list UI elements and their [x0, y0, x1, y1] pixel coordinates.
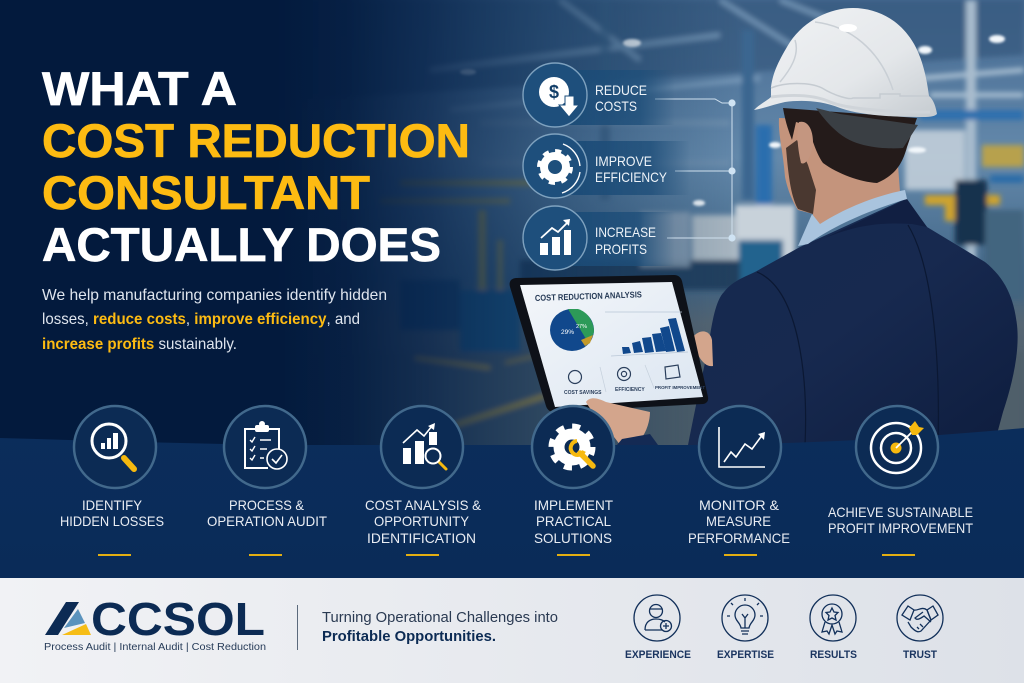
- badge: results: RESULTS: [810, 649, 857, 661]
- consultant wearing white hard hat: [688, 8, 1018, 445]
- step 6: achieve sustainable profit improvement: ACHIEVE SUSTAINABLE: [828, 504, 973, 520]
- step 5: monitor and measure performance: PERFORMANCE: [688, 530, 790, 546]
- badge: trust: TRUST: [903, 649, 937, 661]
- step 2: process and operation audit: PROCESS &: [229, 497, 305, 513]
- step 5: monitor and measure performance: MEASURE: [706, 513, 771, 529]
- hand on right of tablet: [692, 331, 713, 366]
- tablet metrics row: [568, 365, 680, 392]
- callout: improve efficiency: EFFICIENCY: [595, 169, 668, 185]
- footer tagline: [322, 609, 558, 645]
- tablet screen: [520, 282, 703, 407]
- ear: [798, 122, 813, 163]
- callout: increase profits: INCREASE: [595, 224, 656, 240]
- callout: reduce costs: COSTS: [595, 98, 637, 114]
- title: ACTUALLY DOES: [42, 218, 441, 271]
- step 4: implement practical solutions: PRACTICAL: [536, 513, 611, 529]
- tablet metric labels: EFFICIENCY: [615, 387, 645, 393]
- connector lines: [655, 99, 736, 242]
- benefit callouts with connector: [523, 63, 736, 270]
- hand below tablet: [586, 398, 650, 445]
- badge: expertise: [717, 595, 774, 661]
- step 6: achieve sustainable profit improvement: PROFIT IMPROVEMENT: [828, 520, 973, 536]
- shirt collar: [798, 190, 907, 246]
- tablet held by consultant: [510, 275, 713, 445]
- step 5: monitor and measure performance: [688, 406, 790, 556]
- step 4: implement practical solutions: IMPLEMENT: [534, 497, 613, 513]
- hat strap: [816, 108, 918, 148]
- tablet metric labels: COST SAVINGS: [564, 390, 602, 396]
- step 3: cost analysis: OPPORTUNITY: [374, 513, 470, 529]
- badge: trust: [897, 595, 943, 661]
- step 1: identify hidden losses: HIDDEN LOSSES: [60, 513, 164, 529]
- step 3: cost analysis: [365, 406, 482, 556]
- badge: experience: EXPERIENCE: [625, 649, 691, 661]
- step 2: process and operation audit: [207, 406, 327, 556]
- step 3: cost analysis: COST ANALYSIS &: [365, 497, 482, 513]
- factory background photo: [0, 0, 1024, 450]
- step 2: process and operation audit: OPERATION AUDIT: [207, 513, 327, 529]
- tablet metric labels: PROFIT IMPROVEMENT: [655, 385, 705, 390]
- step 3: cost analysis: IDENTIFICATION: [367, 530, 476, 546]
- pie chart: 29%: [561, 329, 574, 336]
- callout: reduce costs: REDUCE: [595, 82, 647, 98]
- callout: improve efficiency: IMPROVE: [595, 153, 652, 169]
- tablet metric labels: [564, 385, 705, 396]
- badge: experience: [625, 595, 691, 661]
- title: [42, 62, 470, 271]
- step 1: identify hidden losses: IDENTIFY: [82, 497, 143, 513]
- step 4: implement practical solutions: SOLUTIONS: [534, 530, 612, 546]
- neck and face: [779, 118, 900, 232]
- badge: results: [810, 595, 857, 661]
- hard hat: [754, 8, 937, 117]
- beard: [786, 140, 816, 214]
- step 1: identify hidden losses: [60, 406, 164, 556]
- step 4: implement practical solutions: [532, 406, 614, 556]
- callout: increase profits: PROFITS: [595, 241, 647, 257]
- callout: improve efficiency: [523, 134, 690, 198]
- pie chart: [550, 309, 594, 351]
- footer tagline: Turning Operational Challenges into: [322, 609, 558, 626]
- footer tagline: Profitable Opportunities.: [322, 628, 496, 645]
- callout: reduce costs: [523, 63, 675, 127]
- intro paragraph: increase profits sustainably.: [42, 336, 237, 353]
- step 6: achieve sustainable profit improvement: [828, 406, 973, 556]
- logo: Process Audit | Internal Audit | Cost Reduction: [44, 641, 266, 653]
- intro paragraph: losses, reduce costs, improve efficiency, and: [42, 311, 360, 328]
- intro paragraph: [42, 287, 387, 353]
- step 5: monitor and measure performance: MONITOR &: [699, 497, 780, 513]
- title: WHAT A: [42, 62, 237, 115]
- tablet body: [510, 275, 708, 412]
- bar chart: [605, 312, 688, 356]
- footer panel: [0, 578, 1024, 683]
- intro paragraph: We help manufacturing companies identify hidden: [42, 287, 387, 304]
- title: COST REDUCTION: [42, 114, 470, 167]
- logo: CCSOL: [91, 593, 265, 645]
- process band: [0, 428, 1024, 580]
- badge: expertise: EXPERTISE: [717, 649, 774, 661]
- logo: [44, 593, 266, 653]
- tablet title: COST REDUCTION ANALYSIS: [535, 289, 642, 303]
- hair: [783, 108, 917, 183]
- callout: reduce costs: $: [549, 82, 559, 102]
- jacket: [688, 199, 1018, 445]
- pie chart: 27%: [576, 324, 587, 330]
- callout: increase profits: [523, 206, 675, 270]
- title: CONSULTANT: [42, 166, 370, 219]
